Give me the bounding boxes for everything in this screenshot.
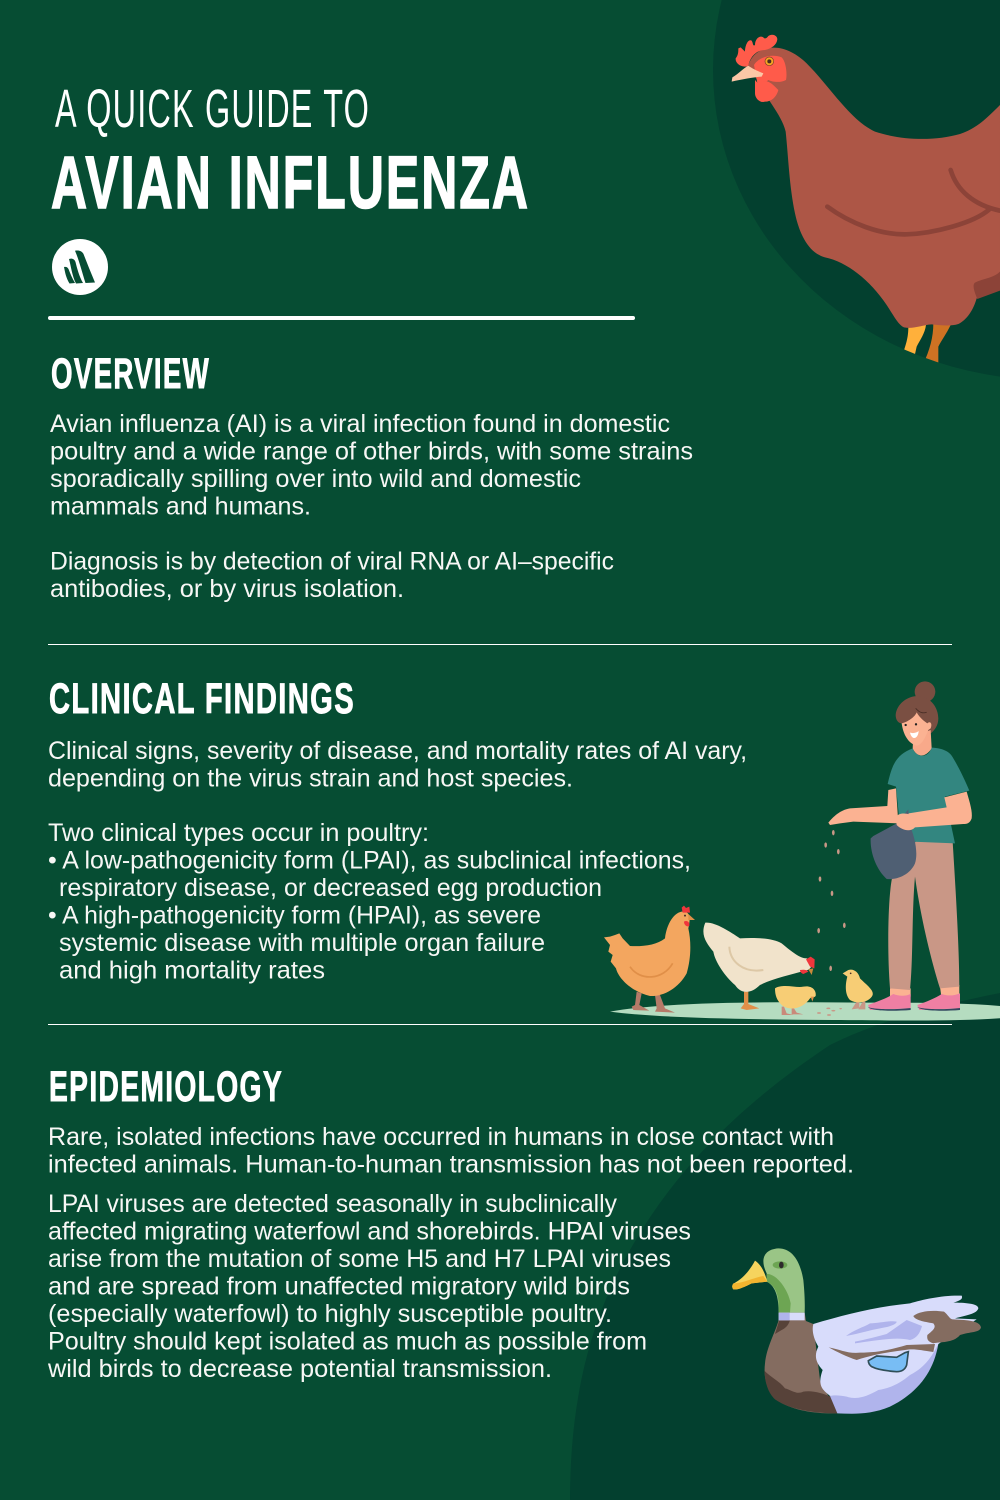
- text block: epidemiology: (especially waterfowl) to highly susceptible poultry.: [48, 1300, 612, 1328]
- text block: overview: poultry and a wide range of other birds, with some strains: [50, 438, 693, 466]
- text block: clinical findings: Clinical signs, severity of disease, and mortality rates of AI vary,: [48, 737, 747, 765]
- divider: clinical rule: [48, 1024, 952, 1025]
- grain: [817, 830, 846, 1016]
- text block: clinical findings: systemic disease with multiple organ failure: [59, 929, 545, 957]
- text block: clinical findings: and high mortality rates: [59, 956, 325, 984]
- text block: epidemiology: arise from the mutation of some H5 and H7 LPAI viruses: [48, 1245, 671, 1273]
- illustration: woman feeding chickens: [604, 681, 1000, 1021]
- text block: clinical findings: respiratory disease, or decreased egg production: [59, 874, 602, 902]
- background shape: top right dark circle: [713, 0, 1000, 380]
- divider: title rule: [48, 316, 635, 320]
- text block: overview: [50, 410, 693, 603]
- text block: overview: Diagnosis is by detection of viral RNA or AI–specific: [50, 548, 614, 576]
- illustration: red hen: [732, 35, 1000, 370]
- title: AVIAN INFLUENZA: [51, 141, 530, 224]
- text block: epidemiology: Rare, isolated infections have occurred in humans in close contact with: [48, 1123, 834, 1151]
- icon: logo: [52, 239, 108, 295]
- text block: clinical findings: depending on the virus strain and host species.: [48, 764, 573, 792]
- text block: clinical findings: Two clinical types occur in poultry:: [48, 819, 429, 847]
- title: A QUICK GUIDE TO: [55, 79, 370, 139]
- ground: [610, 1002, 1000, 1021]
- text block: epidemiology: infected animals. Human-to-human transmission has not been reported.: [48, 1150, 854, 1178]
- text block: epidemiology: Poultry should kept isolated as much as possible from: [48, 1328, 647, 1356]
- text block: overview: antibodies, or by virus isolation.: [50, 575, 404, 603]
- text block: epidemiology: [47, 1123, 854, 1383]
- divider: overview rule: [48, 644, 952, 645]
- chick standing: [843, 970, 873, 1009]
- text block: overview: mammals and humans.: [50, 492, 311, 520]
- text block: epidemiology: LPAI viruses are detected seasonally in subclinically: [48, 1190, 617, 1218]
- woman: [828, 681, 972, 1011]
- white hen: [703, 923, 815, 1010]
- text block: overview: Avian influenza (AI) is a viral infection found in domestic: [50, 410, 670, 438]
- text block: epidemiology: and are spread from unaffected migratory wild birds: [48, 1272, 630, 1300]
- text block: clinical findings: • A high-pathogenicity form (HPAI), as severe: [48, 902, 541, 930]
- chick feeding: [775, 986, 816, 1015]
- illustration: mallard duck: [732, 1248, 981, 1414]
- title: [51, 79, 530, 224]
- text block: overview: sporadically spilling over into wild and domestic: [50, 465, 581, 493]
- orange hen: [604, 906, 695, 1013]
- heading: overview: OVERVIEW: [51, 350, 210, 398]
- background shape: bottom right dark curve: [570, 993, 1000, 1500]
- text block: clinical findings: • A low-pathogenicity form (LPAI), as subclinical infections,: [48, 846, 691, 874]
- text block: clinical findings: [48, 737, 747, 984]
- text block: epidemiology: affected migrating waterfowl and shorebirds. HPAI viruses: [48, 1218, 691, 1246]
- heading: epidemiology: EPIDEMIOLOGY: [49, 1063, 283, 1111]
- heading: clinical findings: CLINICAL FINDINGS: [49, 675, 355, 723]
- text block: epidemiology: wild birds to decrease potential transmission.: [47, 1355, 552, 1383]
